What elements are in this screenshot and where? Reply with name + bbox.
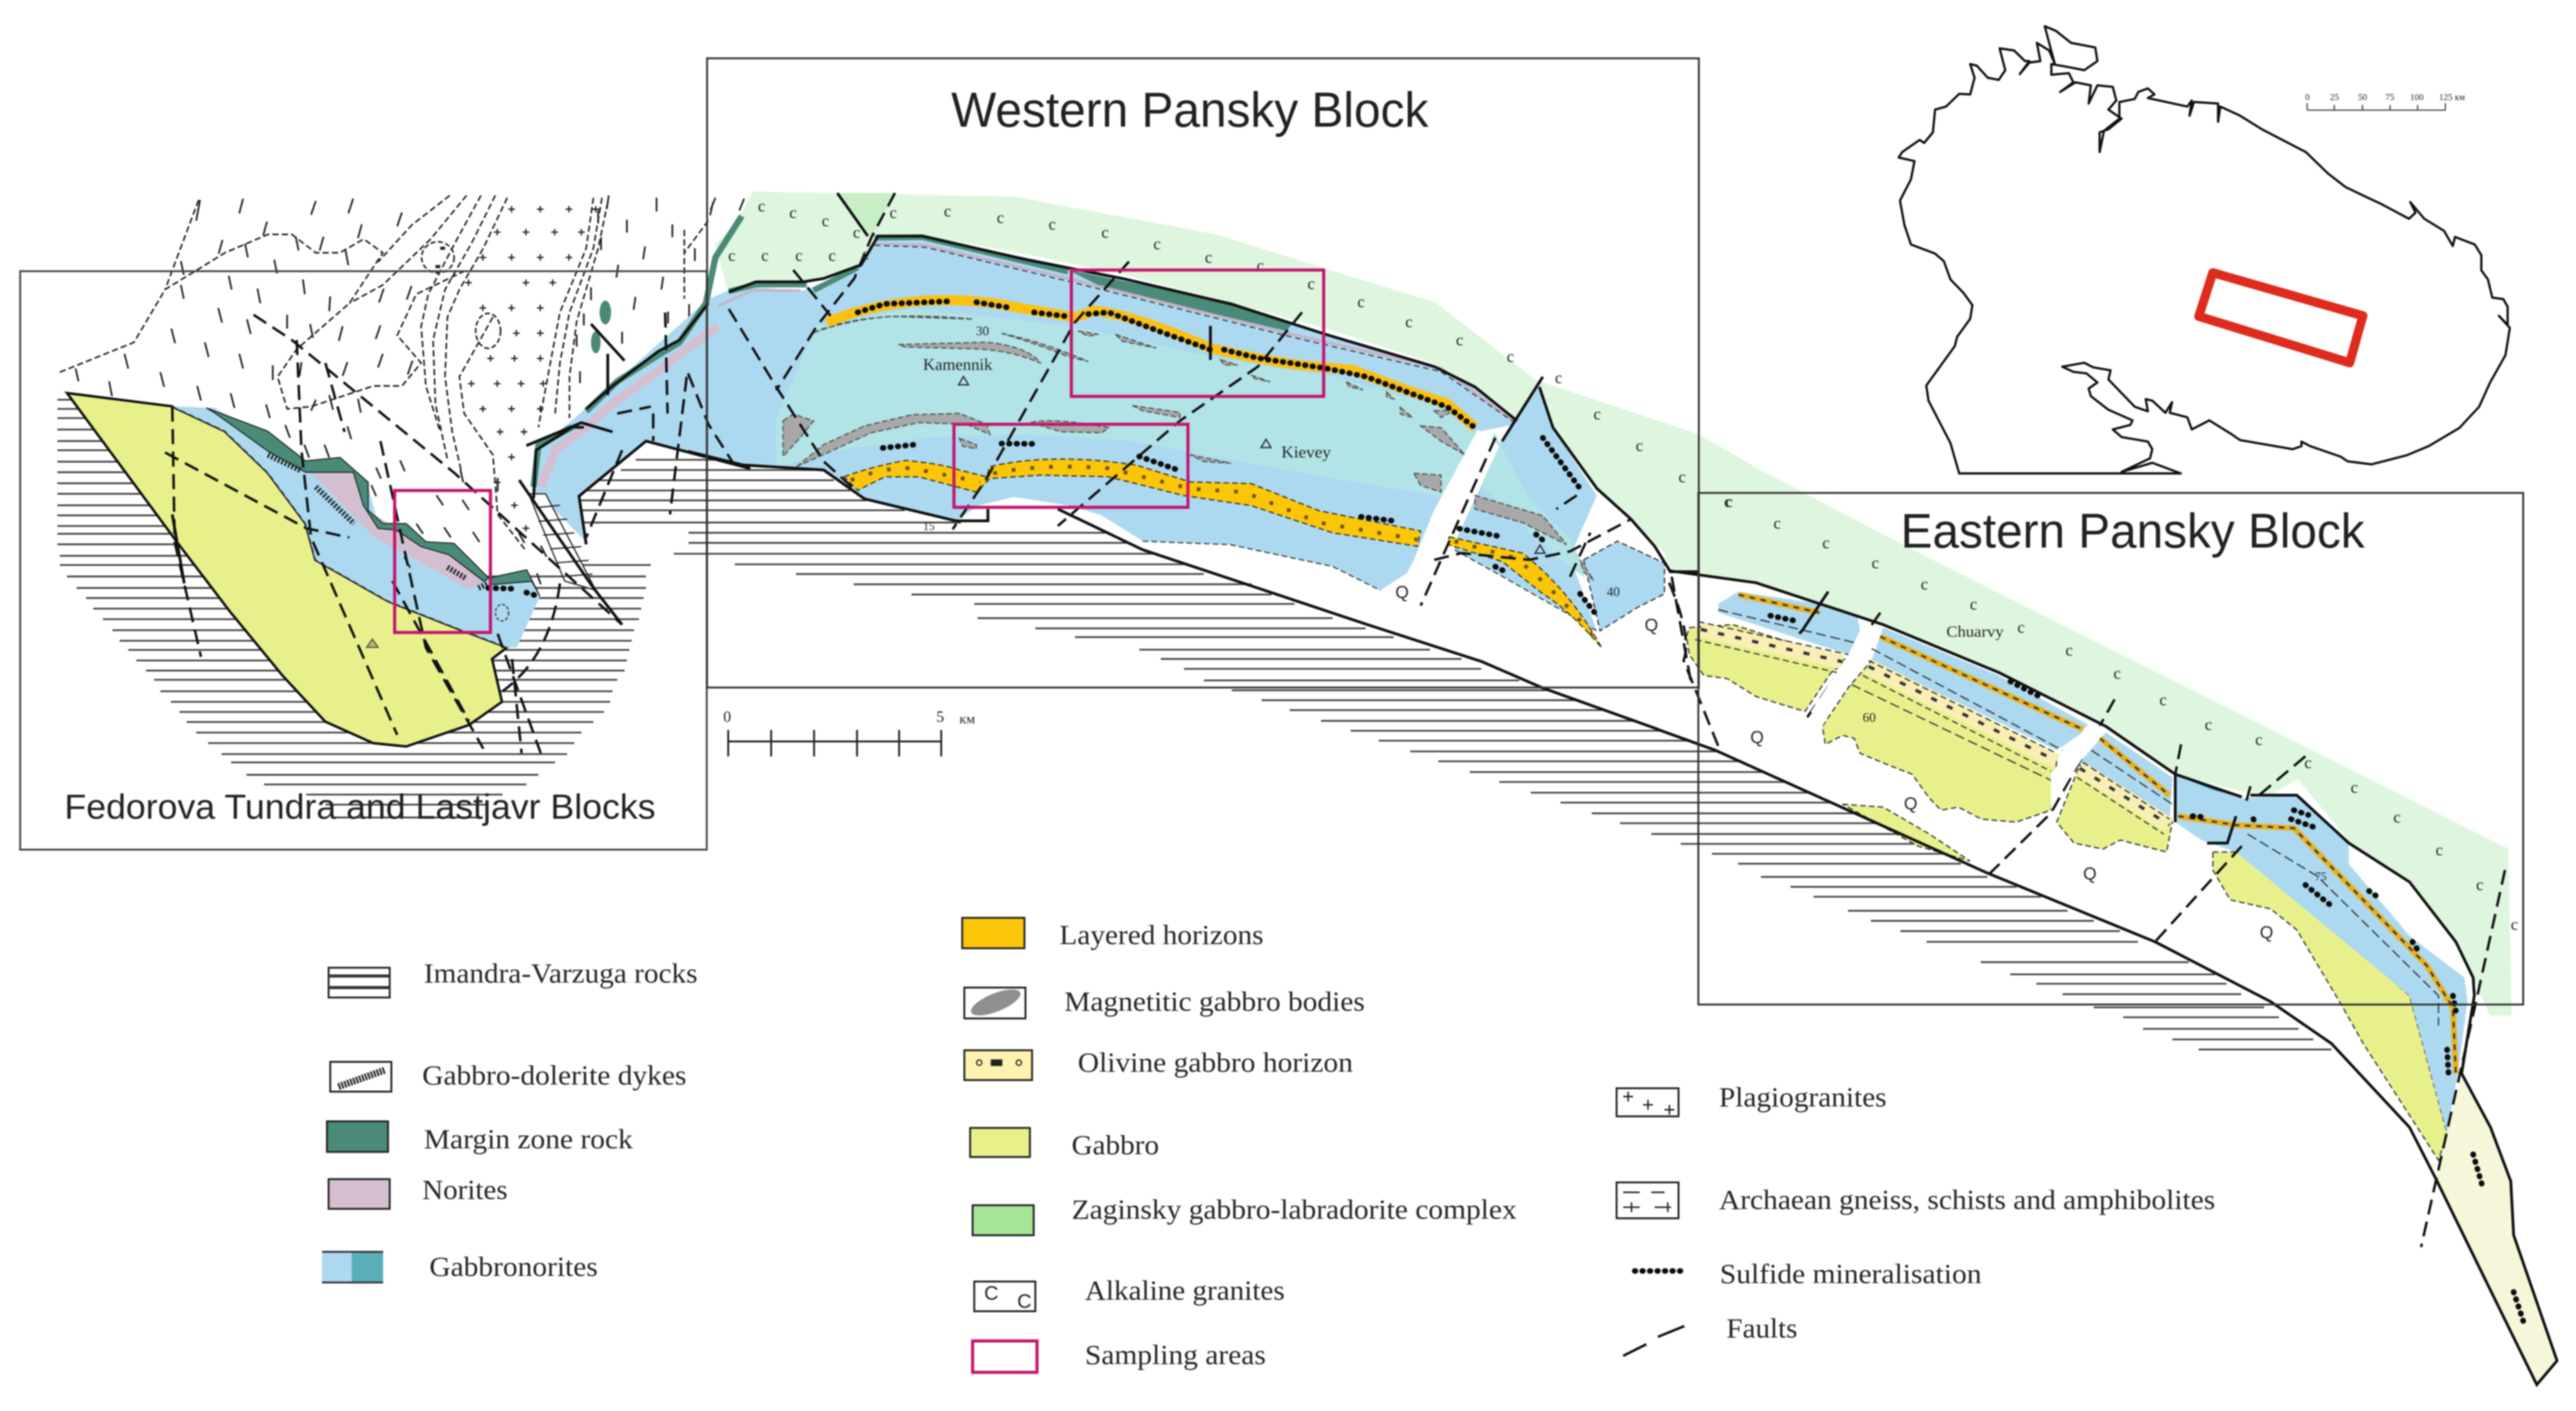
- lower layered horizon: [844, 459, 1421, 546]
- legend: Faults: Faults: [1727, 1313, 1797, 1344]
- coastline: [1899, 26, 2510, 473]
- western block contact: [688, 236, 1699, 729]
- legend: Imandra-Varzuga rocks: Imandra-Varzuga rocks: [424, 958, 697, 989]
- frame: Eastern Pansky Block: [1699, 493, 2523, 1004]
- legend: Norites: [328, 1174, 508, 1209]
- legend: Alkaline granites: C: [984, 1282, 999, 1304]
- heading: Western Pansky Block: Western Pansky Block: [951, 81, 1428, 137]
- legend: Norites: Norites: [422, 1174, 508, 1205]
- inset scale bar: 75: [2385, 93, 2395, 103]
- Imandra-Varzuga hatching: [58, 400, 2331, 1049]
- inset scale bar: 25: [2330, 93, 2339, 103]
- legend: Gabbro-dolerite dykes: [330, 1060, 687, 1091]
- inset scale bar: 100: [2410, 93, 2423, 103]
- dashed contacts: [60, 195, 708, 551]
- Zaginsky darker wedge: [839, 193, 895, 236]
- teal fragment: [2175, 774, 2242, 797]
- plagiogranite crosses: [465, 206, 599, 532]
- legend: Archaean gneiss, schists and amphibolites: [1617, 1183, 2215, 1218]
- sulfide mineralisation: [857, 301, 1596, 614]
- legend: Faults: [1623, 1313, 1797, 1356]
- layered horizon thin: [1739, 595, 2456, 1073]
- map labels: 40: [1607, 584, 1620, 599]
- inset scale bar: 125 км: [2439, 93, 2465, 103]
- magnetitic gabbro bodies: [783, 316, 1594, 580]
- Western east blocks: [1143, 387, 1665, 631]
- brick hatch block: [529, 494, 596, 590]
- triangles: [959, 377, 1545, 554]
- legend: Margin zone rock: Margin zone rock: [424, 1123, 633, 1155]
- legend: Sampling areas: [972, 1339, 1266, 1372]
- map labels: Chuarvy: [1946, 624, 2004, 640]
- green spots: [600, 301, 611, 325]
- legend: Plagiogranites: [1617, 1081, 1887, 1116]
- dykes in norite: [268, 455, 488, 588]
- sampling box Fedorova: [395, 490, 490, 632]
- oval gabbronorite body: [1583, 541, 1665, 631]
- main scale bar: 0: [723, 709, 731, 726]
- Archaean basement symbols: [60, 195, 744, 584]
- map labels: [923, 323, 2326, 942]
- norite band: [215, 413, 484, 590]
- gabbronorite body: [172, 407, 540, 647]
- map labels: 75: [2315, 870, 2326, 883]
- Western geology details: [688, 193, 1699, 729]
- legend: Sulfide mineralisation: Sulfide mineralisation: [1720, 1258, 1981, 1290]
- sampling areas: [395, 270, 1324, 632]
- dip values: 30: [976, 323, 989, 338]
- legend: Zaginsky gabbro-labradorite complex: [972, 1194, 1517, 1235]
- main scale bar: км: [959, 711, 975, 727]
- Fedorova Tundra map units: [67, 393, 540, 746]
- legend column 2: [962, 918, 1517, 1372]
- sampling box west upper: [1071, 270, 1324, 397]
- legend: Sampling areas: Sampling areas: [1085, 1339, 1266, 1370]
- gabbronorite bands: [1719, 592, 2467, 1133]
- map labels: Kievey: [1281, 442, 1331, 461]
- legend: Gabbronorites: [322, 1251, 598, 1283]
- margin zone band: [206, 408, 489, 581]
- legend: Zaginsky gabbro-labradorite complex: Zaginsky gabbro-labradorite complex: [1072, 1194, 1517, 1225]
- legend: Gabbro: [970, 1128, 1159, 1161]
- legend: Archaean gneiss, schists and amphibolites: Archaean gneiss, schists and amphibolites: [1719, 1184, 2215, 1215]
- sampling box west lower: [954, 424, 1188, 507]
- legend: Magnetitic gabbro bodies: [964, 984, 1365, 1021]
- Western Pansky gabbronorite body: [533, 238, 1516, 590]
- inset map of Kola Peninsula: [1899, 26, 2510, 473]
- legend: Alkaline granites: C: [1017, 1290, 1031, 1312]
- small triangle: [366, 639, 378, 647]
- frame: Fedorova Tundra and Lastjavr Blocks: [20, 271, 707, 850]
- pale strip in block: [1475, 433, 1585, 578]
- legend: Layered horizons: Layered horizons: [1059, 919, 1263, 951]
- legend: Magnetitic gabbro bodies: Magnetitic gabbro bodies: [1064, 986, 1365, 1017]
- olivine gabbro horizon: [1701, 629, 2169, 825]
- sulfide mineralisation east: [1770, 615, 2523, 1322]
- inset scale bar: 50: [2358, 93, 2367, 103]
- inset scale bar: [2305, 93, 2465, 110]
- main scale bar: [723, 709, 975, 756]
- legend: Gabbronorites: Gabbronorites: [429, 1251, 598, 1282]
- white wedge at south margin: [979, 497, 1143, 541]
- Fedorova faults: [165, 313, 687, 753]
- white fault gaps east: [1811, 626, 2103, 810]
- Western faults: [688, 193, 1692, 688]
- eastern faults: [1669, 583, 2505, 1247]
- gabbro body: [67, 393, 507, 746]
- gneiss ticks: [76, 195, 744, 584]
- place names: Kamennik: [923, 355, 993, 373]
- upper layered horizon: [827, 300, 1475, 428]
- Eastern Pansky Block geology: [1657, 571, 2557, 1385]
- Western west contacts and margin: [165, 216, 750, 753]
- blue fault block: [1455, 387, 1597, 631]
- legend column 3: [1617, 1081, 2215, 1356]
- contact line: [519, 303, 750, 625]
- legend: Olivine gabbro horizon: Olivine gabbro horizon: [1078, 1047, 1353, 1078]
- legend: Olivine gabbro horizon: [964, 1047, 1353, 1080]
- map labels: 60: [1862, 710, 1876, 725]
- legend column 1: [322, 958, 697, 1283]
- alkaline granite symbols: ccccccccccccccccccccccccccccccccccccccccccccc: [728, 196, 2518, 934]
- inner dashed contacts: [1719, 610, 2438, 1026]
- heading: Eastern Pansky Block: Eastern Pansky Block: [1901, 503, 2365, 558]
- green margin strip: [533, 216, 742, 487]
- legend: Margin zone rock: [327, 1121, 633, 1155]
- gabbro bodies: [1687, 625, 2447, 1160]
- map labels: 15: [923, 520, 934, 533]
- legend: Gabbro: Gabbro: [1071, 1130, 1159, 1161]
- margin zone rock: [1068, 270, 1293, 331]
- eastern contacts: [1657, 571, 2557, 1385]
- legend: Gabbro-dolerite dykes: Gabbro-dolerite dykes: [422, 1060, 687, 1091]
- legend: Layered horizons: [962, 918, 1263, 951]
- Quaternary labels: QQQQQQ: [1395, 582, 2273, 942]
- pink norite strip: [541, 326, 718, 487]
- main scale bar: 5: [936, 709, 944, 726]
- white fault gap: [1408, 430, 1499, 595]
- legend: Alkaline granites: Alkaline granites: [1085, 1275, 1285, 1306]
- pale gabbronorite interior: [776, 309, 1590, 580]
- legend: Imandra-Varzuga rocks: [328, 958, 697, 998]
- heading: Fedorova Tundra and Lastjavr Blocks: Fedorova Tundra and Lastjavr Blocks: [64, 787, 655, 826]
- study area rectangle: [2199, 273, 2363, 363]
- Zaginsky gabbro-labradorite complex band: [715, 191, 2512, 1016]
- pale gabbro tail: [2435, 1073, 2557, 1385]
- legend: Plagiogranites: Plagiogranites: [1719, 1081, 1887, 1113]
- frame: Western Pansky Block: [707, 58, 1699, 687]
- inset scale bar: 0: [2305, 93, 2310, 103]
- legend: Alkaline granites: [974, 1275, 1285, 1312]
